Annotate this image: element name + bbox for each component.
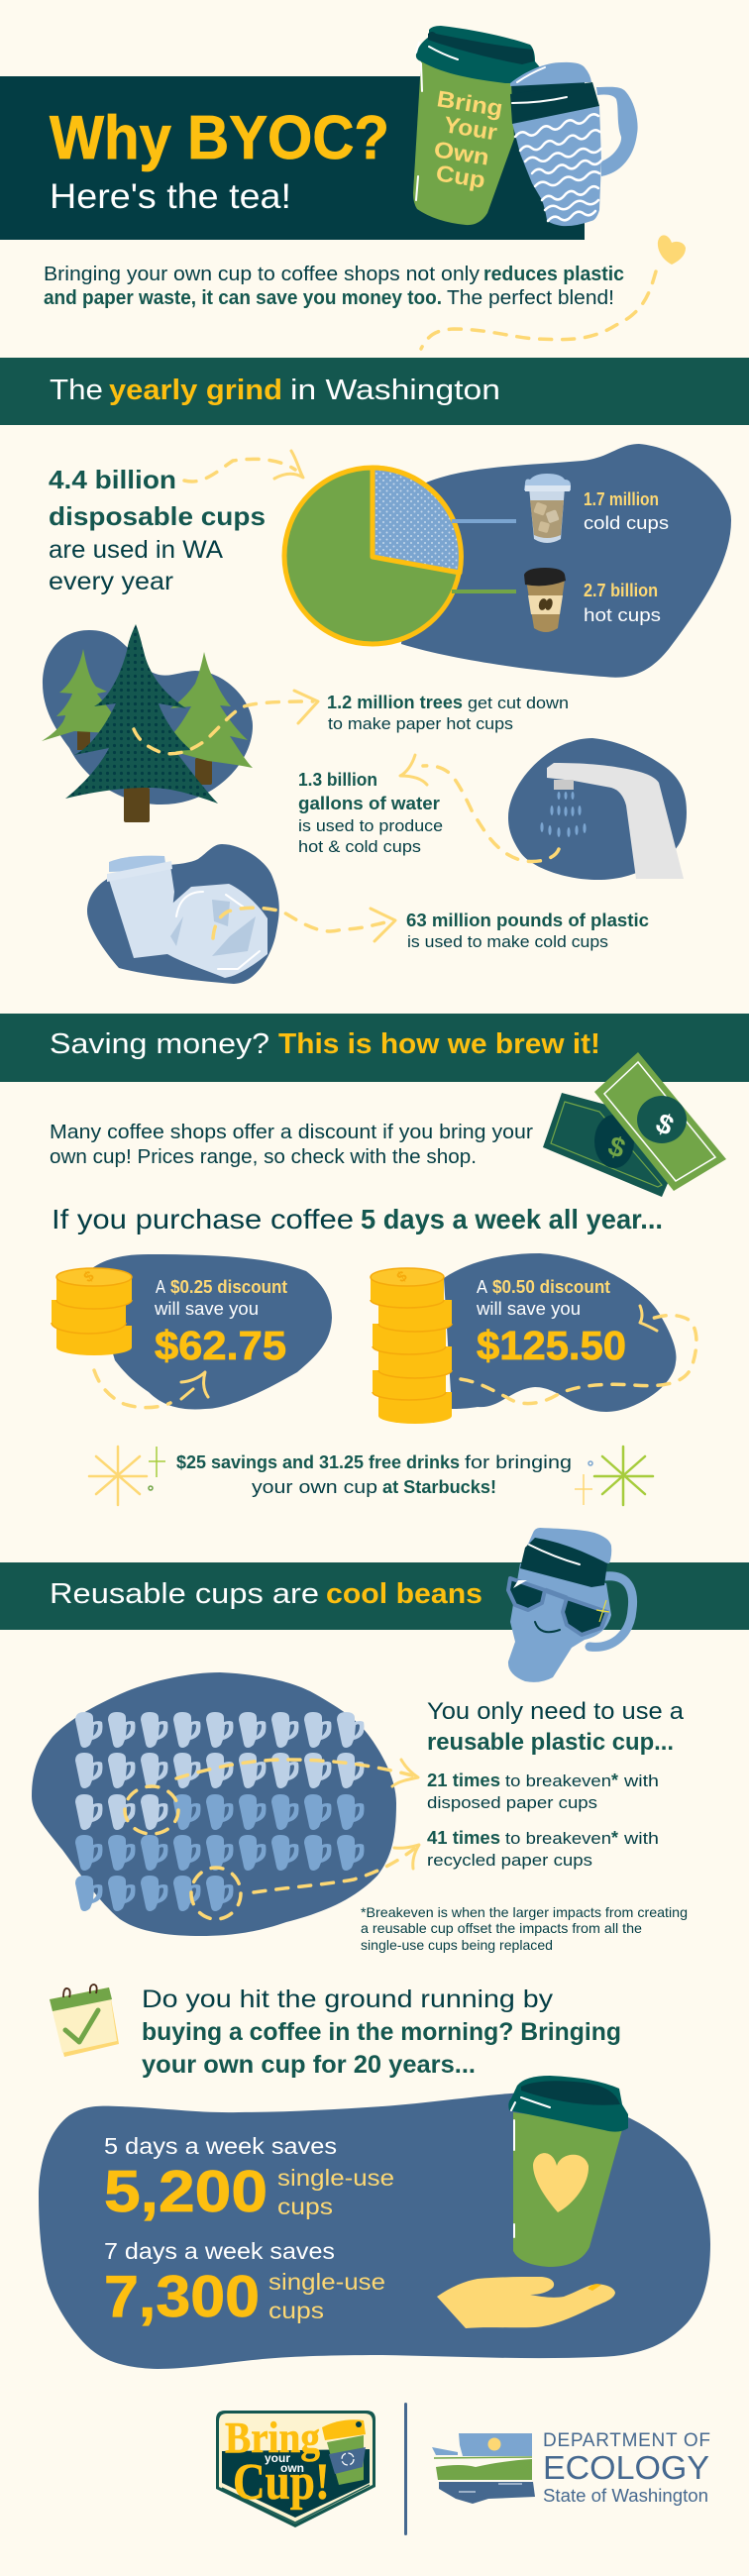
- text: water: gallons of water: [298, 794, 440, 813]
- text: 4.4 billion disposable cups: every year: [49, 568, 173, 595]
- stat: 7 days: [104, 2238, 385, 2329]
- icon: mug with sunglasses: [508, 1528, 633, 1682]
- text: saves $125.50: will save you: [476, 1299, 581, 1319]
- text: saves $125.50: $125.50: [477, 1323, 626, 1368]
- logo: Bring your own Cup badge: own: [280, 2461, 304, 2475]
- arrow: faucet to text: [400, 755, 559, 862]
- section heading: yearly grind: [0, 358, 749, 425]
- section heading: cool beans: [0, 1562, 749, 1630]
- text: saves $62.75: will save you: [154, 1299, 259, 1319]
- panel: 20-year savings: [39, 2076, 710, 2369]
- text: 21 times: *: [611, 1771, 618, 1790]
- text: 21 times: to breakeven: [505, 1771, 611, 1790]
- text: 21 times: [427, 1771, 659, 1812]
- icon: green travel cup: Bring: [435, 85, 504, 121]
- icon: coin stack small: $: [81, 1267, 98, 1286]
- text: plastic: [406, 911, 649, 951]
- stat: 7 days: 7 days a week saves: [104, 2238, 335, 2264]
- icon: calendar: [50, 1985, 119, 2057]
- section heading: cool beans: Reusable cups are: [50, 1578, 319, 1610]
- discount text: own cup! Prices range, so check with the shop.: [50, 1146, 477, 1168]
- text: 20 years question: buying a coffee in the morning? Bringing: [142, 2018, 621, 2046]
- stat: 7 days: cups: [268, 2298, 324, 2323]
- logo: Bring your own Cup badge: your: [265, 2451, 290, 2465]
- panel: $0.50 discount: [371, 1253, 696, 1424]
- text: plastic: 63 million pounds of plastic: [406, 911, 649, 930]
- section heading: yearly grind: yearly grind: [109, 375, 282, 406]
- icon: green travel cup: Cup: [434, 160, 487, 193]
- text: 20 years question: [142, 1986, 621, 2079]
- icon: money: [543, 1052, 726, 1197]
- callout: Starbucks savings: [176, 1452, 572, 1497]
- heading: 5 days a week: 5 days a week all year...: [361, 1204, 663, 1234]
- text: water: 1.3 billion: [298, 770, 377, 790]
- stat: 7 days: single-use: [268, 2269, 385, 2295]
- logo: Department of Ecology: [432, 2430, 710, 2506]
- stat: 5 days: 5 days a week saves: [104, 2133, 337, 2159]
- pie chart: [284, 468, 461, 644]
- arrow: trees to text: [134, 691, 318, 754]
- hero banner: [0, 76, 585, 240]
- section heading: cool beans: cool beans: [326, 1578, 482, 1610]
- section heading: saving money: Saving money?: [50, 1028, 269, 1060]
- section heading: saving money: [0, 1014, 749, 1082]
- text: trees: [327, 693, 569, 733]
- stat: 7 days: 7,300: [104, 2264, 260, 2329]
- text: trees: get cut down: [468, 694, 569, 712]
- text: 4.4 billion disposable cups: are used in WA: [49, 536, 223, 564]
- text: 21 times: 21 times: [427, 1771, 500, 1790]
- text: 41 times: to breakeven: [505, 1829, 611, 1848]
- icon: coin stack large: [371, 1267, 452, 1424]
- panel: cup breakdown: [284, 444, 731, 678]
- text: 4.4 billion disposable cups: [49, 465, 266, 595]
- heading: 5 days a week: If you purchase coffee: [52, 1204, 354, 1234]
- icon: blue reusable mug: [510, 62, 638, 226]
- icon: green travel cup: Your: [442, 111, 499, 145]
- section heading: yearly grind: The: [50, 375, 103, 406]
- callout: Starbucks savings: $25 savings and 31.25 free drinks: [176, 1452, 460, 1472]
- icon: sparkles right: [575, 1447, 653, 1505]
- icon: cup with heart: [508, 2076, 628, 2267]
- arrow: 41 times: [254, 1845, 419, 1892]
- text: reusable plastic cup: reusable plastic cup...: [427, 1729, 674, 1756]
- icon: sparkles left: [89, 1447, 165, 1505]
- text: saves $62.75: $62.75: [155, 1323, 286, 1368]
- arrow: 21 times: [176, 1760, 418, 1786]
- footnote: *Breakeven is when the larger impacts from creating: [361, 1904, 688, 1920]
- stat: 5 days: 5,200: [104, 2159, 268, 2224]
- callout: Starbucks savings: your own cup: [252, 1477, 377, 1497]
- icon: green travel cup: [413, 26, 540, 225]
- text: 41 times: *: [611, 1828, 618, 1848]
- text: 20 years question: Do you hit the ground running by: [142, 1986, 554, 2013]
- text: 4.4 billion disposable cups: disposable cups: [49, 501, 266, 531]
- icon: coin stack small: [52, 1267, 132, 1355]
- logo: Bring your own Cup badge: [216, 2411, 375, 2527]
- text: 41 times: with: [623, 1829, 659, 1848]
- callout: Starbucks savings: for bringing: [465, 1452, 572, 1472]
- icon: hot cup: [524, 568, 566, 632]
- text: plastic: is used to make cold cups: [407, 932, 608, 951]
- subtitle: Here's the tea!: [50, 177, 291, 216]
- text: saves $125.50: A: [477, 1277, 487, 1297]
- footnote: single-use cups being replaced: [361, 1937, 553, 1953]
- text: saves $62.75: $0.25 discount: [170, 1277, 287, 1297]
- icon: money: $: [604, 1130, 630, 1164]
- label: cold cups: [584, 489, 669, 533]
- intro paragraph: [44, 264, 624, 309]
- icon: cold cup: [524, 474, 571, 543]
- text: 21 times: disposed paper cups: [427, 1793, 597, 1812]
- arrow: to pie chart: [184, 451, 303, 482]
- arrow: coins to savings: [461, 1306, 696, 1404]
- text: trees: to make paper hot cups: [328, 714, 513, 733]
- text: trees: 1.2 million trees: [327, 693, 463, 712]
- footnote: a reusable cup offset the impacts from all the: [361, 1920, 642, 1936]
- intro paragraph: and paper waste, it can save you money too.: [44, 287, 442, 309]
- icon: coin stack large: $: [394, 1267, 411, 1286]
- text: water: [298, 770, 443, 856]
- panel: $0.25 discount: [52, 1254, 332, 1409]
- text: reusable plastic cup: [427, 1698, 685, 1756]
- text: saves $62.75: [154, 1277, 287, 1368]
- text: saves $62.75: A: [156, 1277, 165, 1297]
- illustration: trees: [42, 624, 253, 822]
- stat: 5 days: cups: [277, 2194, 333, 2219]
- logo: Department of Ecology: DEPARTMENT OF: [543, 2430, 710, 2451]
- stat: 5 days: single-use: [277, 2165, 394, 2191]
- text: 21 times: with: [623, 1771, 659, 1790]
- label: hot cups: 2.7 billion: [584, 581, 658, 600]
- intro paragraph: reduces plastic: [483, 264, 624, 285]
- icon: open hand: [437, 2277, 615, 2328]
- text: saves $125.50: [476, 1277, 626, 1368]
- text: saves $125.50: $0.50 discount: [492, 1277, 610, 1297]
- callout: Starbucks savings: at Starbucks!: [382, 1477, 496, 1497]
- text: reusable plastic cup: You only need to use a: [427, 1698, 685, 1725]
- label: hot cups: [584, 581, 661, 625]
- intro paragraph: Bringing your own cup to coffee shops not only: [44, 264, 480, 285]
- text: 41 times: [427, 1828, 659, 1870]
- text: 41 times: recycled paper cups: [427, 1851, 592, 1870]
- label: cold cups: 1.7 million: [584, 489, 659, 509]
- cup in badge: [322, 2419, 366, 2485]
- section heading: saving money: This is how we brew it!: [278, 1028, 600, 1060]
- logo: Department of Ecology: State of Washington: [543, 2486, 708, 2506]
- intro paragraph: The perfect blend!: [447, 287, 614, 309]
- text: 4.4 billion disposable cups: 4.4 billion: [49, 465, 176, 494]
- logo: Bring your own Cup badge: Bring: [225, 2414, 320, 2462]
- text: water: is used to produce: [298, 816, 443, 835]
- logo: Bring your own Cup badge: Cup!: [233, 2454, 330, 2511]
- icon: heart with dashed trail: [421, 235, 686, 349]
- stat: 5 days: [104, 2133, 394, 2224]
- arrow: coins to savings: [94, 1370, 208, 1408]
- illustration: plastic cup and bag: [87, 844, 279, 984]
- text: 41 times: 41 times: [427, 1828, 500, 1848]
- discount text: [50, 1122, 533, 1168]
- icon: green travel cup: Own: [432, 136, 491, 170]
- label: cold cups: cold cups: [584, 513, 669, 533]
- text: water: hot & cold cups: [298, 837, 421, 856]
- arrow: plastic to text: [213, 908, 395, 941]
- label: hot cups: hot cups: [584, 605, 661, 625]
- icon: money: $: [651, 1107, 679, 1141]
- text: 20 years question: your own cup for 20 years...: [142, 2051, 476, 2079]
- heading: 5 days a week: [52, 1204, 663, 1234]
- logo: Department of Ecology: ECOLOGY: [543, 2449, 709, 2486]
- illustration: faucet: [508, 738, 687, 880]
- footnote: [361, 1904, 688, 1953]
- panel: mug grid: [32, 1672, 396, 1936]
- section heading: yearly grind: in Washington: [290, 375, 500, 406]
- discount text: Many coffee shops offer a discount if you bring your: [50, 1122, 533, 1143]
- title: Why BYOC?: [50, 104, 389, 172]
